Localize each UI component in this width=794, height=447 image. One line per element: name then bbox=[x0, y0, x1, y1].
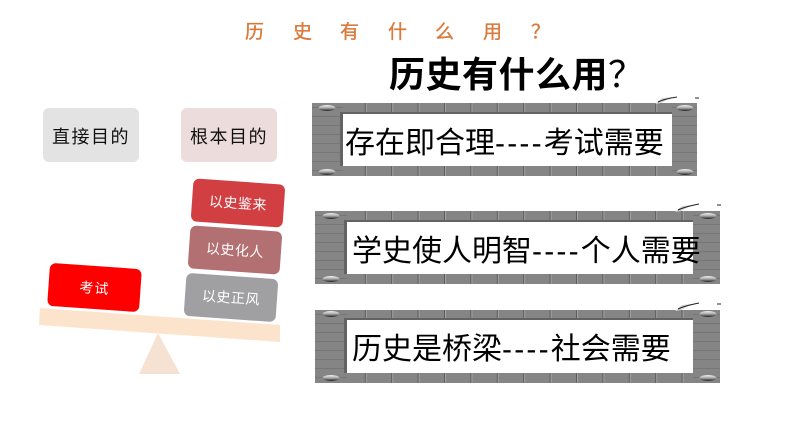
frame 3 text: 历史是桥梁----社会需要 bbox=[352, 333, 671, 366]
block: history educates people: 以史化人 bbox=[206, 240, 264, 260]
balance scale bbox=[39, 178, 285, 374]
block: history as mirror bbox=[191, 178, 285, 228]
small orange title bbox=[245, 21, 550, 43]
box: fundamental purpose: 根本目的 bbox=[190, 127, 268, 147]
scale fulcrum bbox=[139, 333, 180, 374]
small orange title: ？ bbox=[531, 22, 550, 43]
small orange title: 用 bbox=[483, 22, 502, 43]
block: history corrects conduct: 以史正风 bbox=[202, 287, 260, 308]
frame 2 text: 学史使人明智----个人需要 bbox=[352, 235, 701, 268]
box: fundamental purpose bbox=[181, 108, 277, 162]
frame 3: social need bbox=[315, 303, 721, 383]
scale beam bbox=[39, 308, 280, 342]
box: direct purpose: 直接目的 bbox=[52, 127, 130, 147]
block: exam bbox=[47, 263, 142, 312]
frame 2: personal need bbox=[315, 204, 721, 284]
block: exam: 考试 bbox=[79, 279, 110, 297]
small orange title: 么 bbox=[435, 21, 454, 43]
small orange title: 什 bbox=[388, 21, 407, 43]
block: history educates people bbox=[188, 225, 282, 275]
frame 1 text: 存在即合理----考试需要 bbox=[345, 127, 664, 160]
block: history as mirror: 以史鉴来 bbox=[209, 193, 267, 213]
small orange title: 有 bbox=[340, 21, 359, 43]
small orange title: 历 bbox=[245, 22, 264, 43]
block: history corrects conduct bbox=[184, 273, 278, 322]
box: direct purpose bbox=[43, 108, 139, 162]
frame 1: exam need bbox=[312, 97, 699, 176]
small orange title: 史 bbox=[293, 21, 312, 43]
main heading: 历史有什么用？ bbox=[389, 54, 645, 95]
